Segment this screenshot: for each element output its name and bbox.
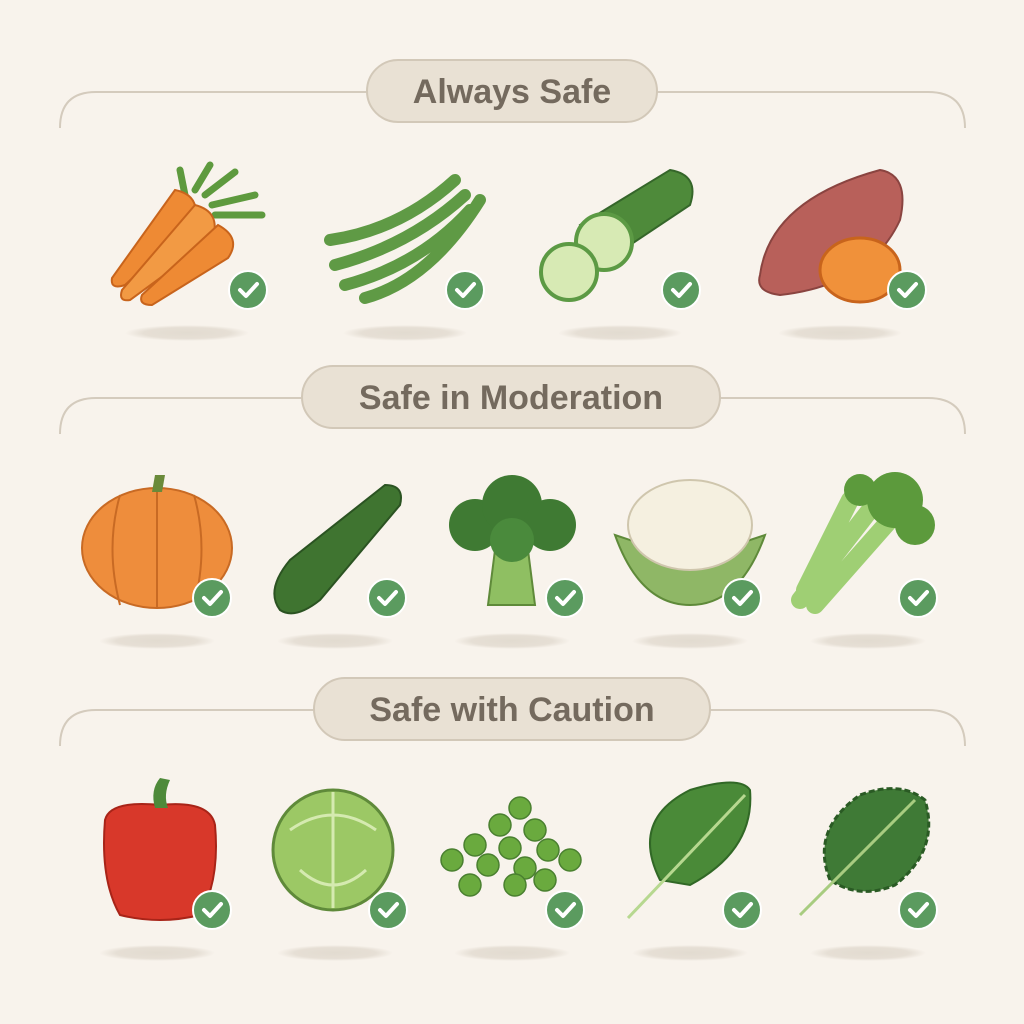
icon: celery — [800, 472, 937, 649]
icon: broccoli — [449, 475, 584, 649]
section header: Always Safe: Always Safe — [413, 73, 611, 111]
section header: Safe with Caution: Safe with Caution — [369, 691, 655, 729]
icon: sweet potato — [759, 170, 926, 341]
icon: carrots — [112, 165, 267, 341]
icon: cauliflower — [615, 480, 765, 649]
icon: spinach — [628, 782, 761, 961]
section header: Safe with Caution — [60, 678, 965, 746]
icon: kale — [800, 789, 937, 961]
icon: cucumber — [541, 170, 700, 341]
icon: zucchini — [274, 485, 406, 649]
icon: red pepper — [99, 778, 231, 961]
section header: Safe in Moderation — [60, 366, 965, 434]
section header: Always Safe — [60, 60, 965, 128]
section header: Safe in Moderation: Safe in Moderation — [359, 379, 663, 417]
icon: peas — [441, 797, 584, 961]
icon: brussels sprout — [273, 790, 407, 961]
icon: pumpkin — [82, 475, 232, 649]
icon: green beans — [330, 180, 484, 341]
